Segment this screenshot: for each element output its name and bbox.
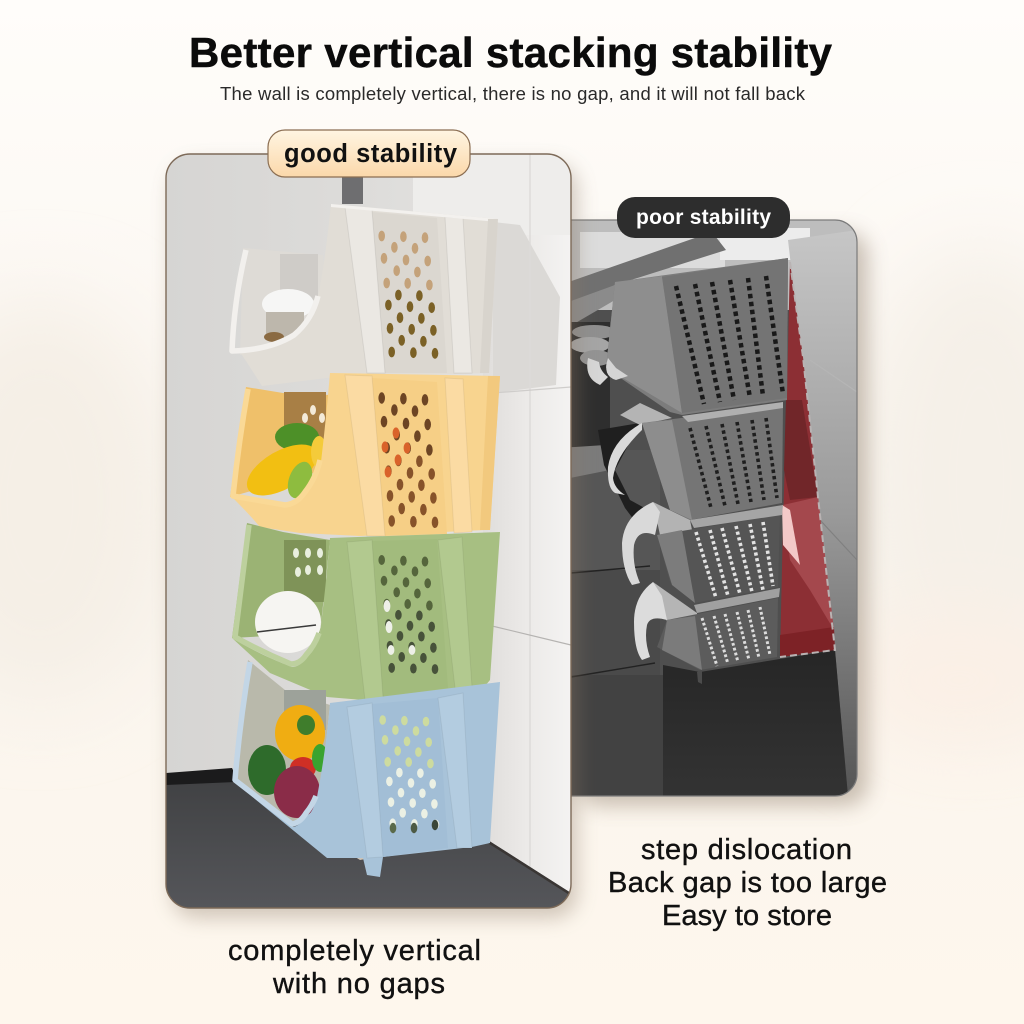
basket 1 (grey) xyxy=(606,258,788,415)
basket: yellow second tier xyxy=(230,373,500,536)
caption: poor stability xyxy=(608,834,887,932)
red gap highlight xyxy=(780,262,835,657)
badge: poor stability xyxy=(617,197,790,238)
caption: good stability: completely vertical xyxy=(228,935,481,967)
badge: poor stability: poor stability xyxy=(636,206,771,229)
panel: good stability photo xyxy=(166,154,577,918)
wall and floor background xyxy=(166,154,571,908)
caption: poor stability: Easy to store xyxy=(662,900,832,932)
basket 2 (grey) xyxy=(608,402,783,520)
panel: poor stability photo xyxy=(540,220,868,806)
subtitle: The wall is completely vertical, there is no gap, and it will not fall back xyxy=(220,83,806,104)
caption: poor stability: Back gap is too large xyxy=(608,867,887,899)
basket 4 (grey) xyxy=(634,582,780,684)
basket: beige top tier xyxy=(232,204,498,386)
clutter above the baskets xyxy=(560,220,857,447)
caption: good stability: with no gaps xyxy=(272,968,445,1000)
badge: good stability xyxy=(268,130,470,177)
basket 3 (grey) xyxy=(622,502,783,603)
tiled wall xyxy=(788,230,857,796)
badge: good stability: good stability xyxy=(284,140,458,168)
title: Better vertical stacking stability xyxy=(189,29,833,76)
caption: good stability xyxy=(228,935,481,1000)
basket: blue bottom tier xyxy=(233,660,500,877)
caption: poor stability: step dislocation xyxy=(641,834,852,866)
basket: green third tier xyxy=(232,523,500,700)
floor xyxy=(560,403,848,796)
